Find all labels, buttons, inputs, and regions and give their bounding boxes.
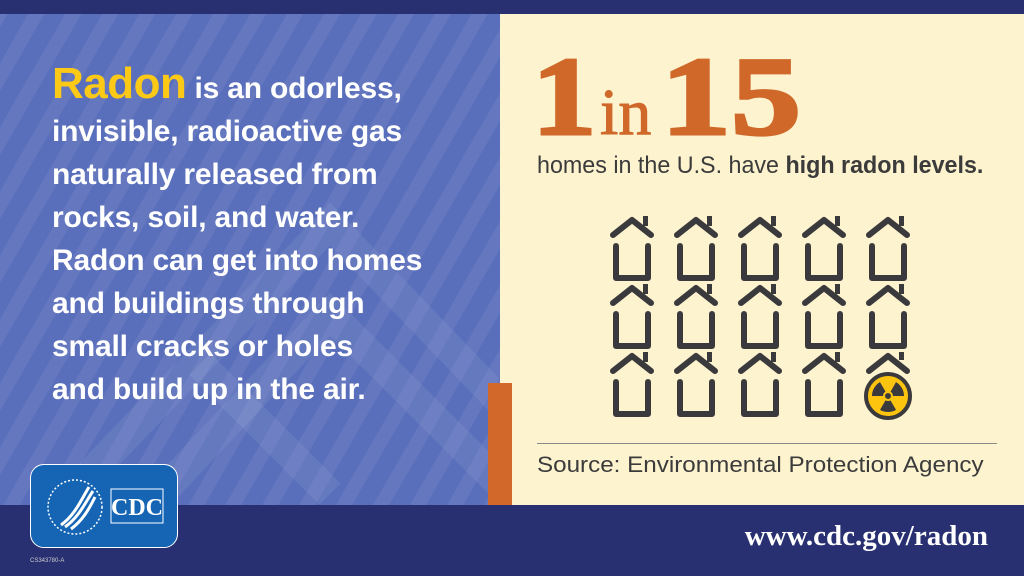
text block: radon description: naturally released from <box>52 158 378 191</box>
subheading: homes in the U.S. have high radon levels. <box>537 152 983 179</box>
accent: orange bar <box>488 383 512 505</box>
panel: right cream <box>500 14 1024 505</box>
top bar <box>0 0 1024 14</box>
source text: Source: Environmental Protection Agency <box>537 452 984 477</box>
url: www.cdc.gov/radon <box>745 520 988 552</box>
panel: left blue patterned <box>0 14 500 505</box>
heading: 1 in 15: 1 <box>532 35 596 159</box>
text block: radon description: invisible, radioactive gas <box>52 115 402 148</box>
heading: 1 in 15 <box>532 35 801 159</box>
chart: house icon grid <box>610 216 912 420</box>
logo: HHS CDC: CDC <box>111 495 163 521</box>
text block: radon description: Radon is an odorless, <box>52 59 402 108</box>
icon: radioactive house <box>866 352 910 418</box>
logo: HHS CDC <box>30 464 178 548</box>
heading: 1 in 15: in <box>600 76 651 149</box>
text block: radon description <box>52 59 422 406</box>
text block: radon description: rocks, soil, and water. <box>52 201 359 234</box>
text block: radon description: and build up in the air. <box>52 373 366 406</box>
code text: CS343780-A <box>30 558 64 564</box>
text block: radon description: and buildings through <box>52 287 364 320</box>
text block: radon description: Radon can get into homes <box>52 244 422 277</box>
heading: 1 in 15: 15 <box>661 35 801 159</box>
text block: radon description: small cracks or holes <box>52 330 353 363</box>
